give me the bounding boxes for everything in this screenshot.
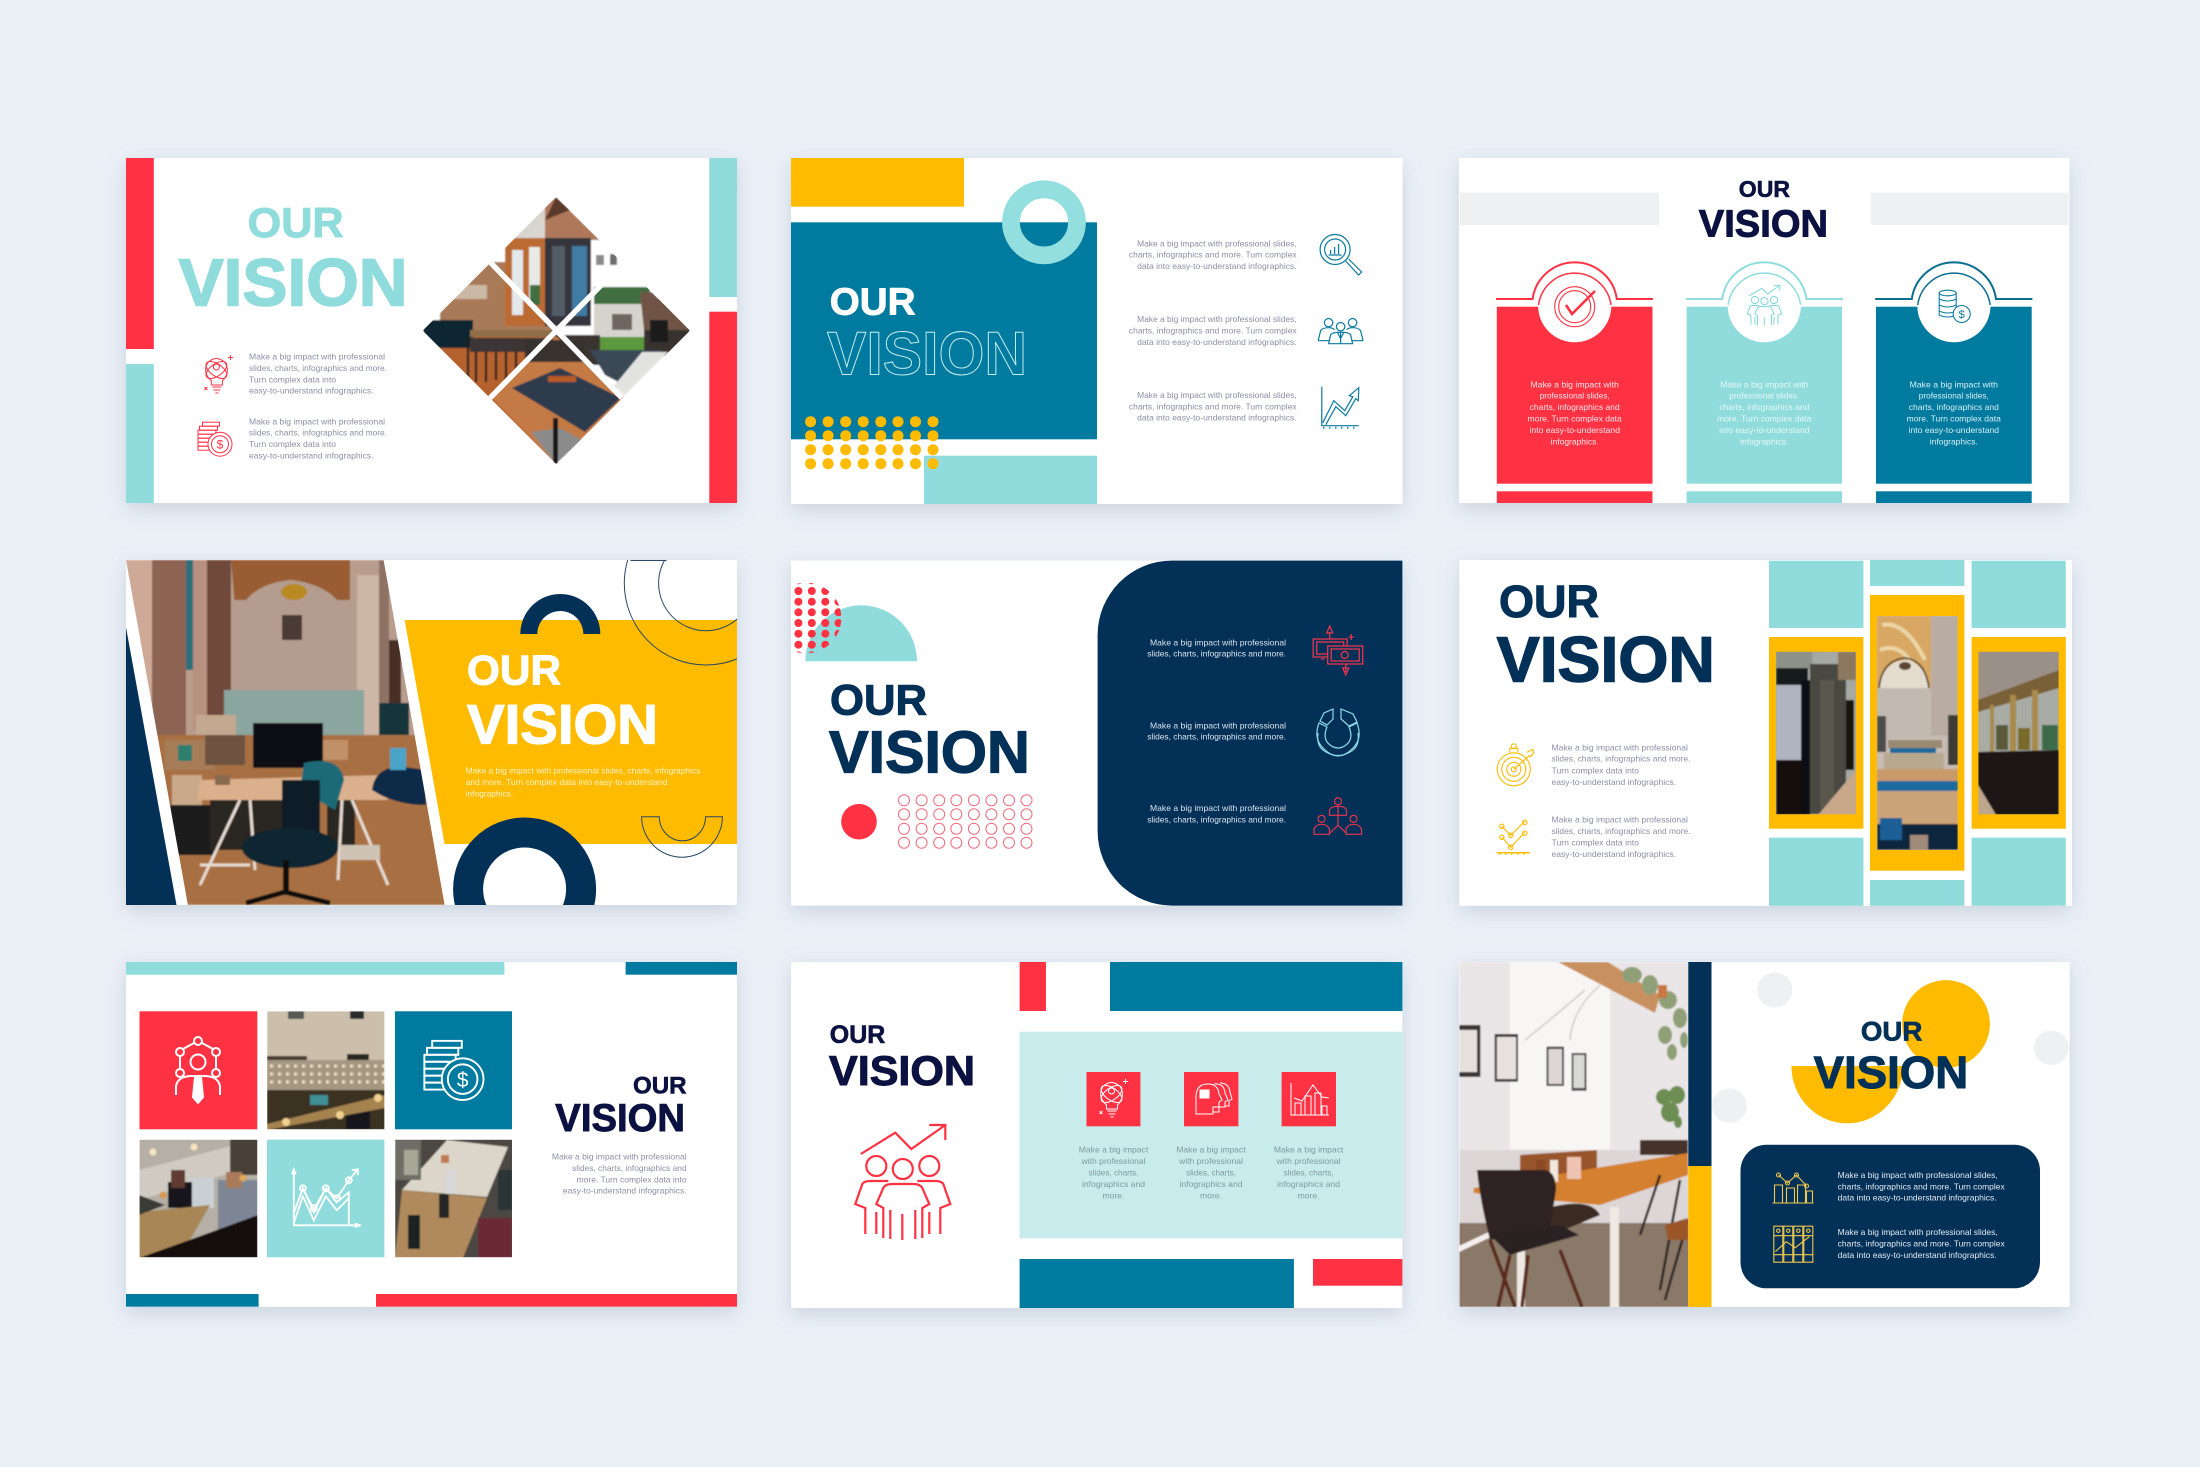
text block 2 bbox=[1552, 815, 1690, 859]
text block 1: Make a big impact with professional bbox=[1552, 742, 1688, 752]
text block 2: Make a big impact with professional slides, bbox=[1137, 314, 1297, 324]
card text: charts, infographics and bbox=[1719, 402, 1810, 412]
top blue strip bbox=[626, 962, 737, 975]
title: vision outline: VISION bbox=[827, 320, 1027, 388]
bottom red strip bbox=[376, 1294, 737, 1307]
text block: easy-to-understand infographics. bbox=[563, 1186, 687, 1196]
yellow block bbox=[405, 620, 737, 844]
blue block bbox=[791, 222, 1097, 439]
yellow photo frames bbox=[1769, 595, 2066, 871]
title: our: OUR bbox=[1861, 1017, 1922, 1047]
text block 1: data into easy-to-understand infographics. bbox=[1838, 1193, 1997, 1203]
card text: Make a big impact with bbox=[1530, 379, 1619, 389]
icon: coin stack: $ bbox=[1959, 309, 1965, 321]
red right bar bbox=[709, 312, 737, 503]
panel: slide 5 navy right panel bbox=[791, 561, 1402, 906]
navy info card bbox=[1740, 1145, 2040, 1288]
gray circles bbox=[1712, 972, 2069, 1123]
gray band left bbox=[1460, 193, 1659, 225]
title: vision: VISION bbox=[1699, 204, 1828, 246]
yellow dot grid bbox=[805, 416, 938, 469]
text column 3 bbox=[1274, 1145, 1344, 1201]
bottom blue strip bbox=[126, 1294, 259, 1307]
photo: string lights bbox=[267, 1011, 385, 1130]
icon: area chart bbox=[292, 1169, 360, 1227]
icon: team growth large bbox=[855, 1125, 950, 1240]
text block 1: Make a big impact with professional bbox=[1150, 637, 1286, 647]
icon: line chart bbox=[1497, 820, 1530, 855]
panel: slide 9 cafe photo bbox=[1459, 962, 2070, 1307]
card: blue bbox=[1875, 262, 2032, 503]
panel: slide 8 light teal panel bbox=[791, 962, 1402, 1308]
card text: charts, infographics and bbox=[1909, 402, 1999, 412]
icon: org people bbox=[1314, 798, 1362, 834]
card: bulb bbox=[1086, 1072, 1140, 1126]
card text: into easy-to-understand bbox=[1719, 425, 1810, 435]
thin half ring: bottom right bbox=[642, 817, 722, 857]
yellow block bbox=[791, 158, 964, 207]
text column 1: Make a big impact bbox=[1079, 1145, 1149, 1155]
text block: infographics. bbox=[466, 788, 513, 798]
title: our: OUR bbox=[467, 647, 561, 694]
text block 1 bbox=[1129, 238, 1298, 271]
icon: stopwatch target bbox=[1497, 744, 1534, 786]
light teal block bbox=[1020, 1032, 1402, 1238]
text block 1 bbox=[1838, 1170, 2006, 1203]
infographic canvas bbox=[120, 158, 2078, 1320]
text block 1 bbox=[249, 352, 387, 396]
text column 1: slides, charts, bbox=[1088, 1168, 1138, 1178]
title: our: OUR bbox=[830, 282, 916, 324]
text block 3: charts, infographics and more. Turn complex bbox=[1129, 401, 1298, 411]
text column 1 bbox=[1079, 1145, 1149, 1201]
text column 3: infographics and bbox=[1277, 1179, 1340, 1189]
icon: binders bbox=[1774, 1226, 1813, 1262]
yellow bar bbox=[1688, 1166, 1712, 1307]
text column 2 bbox=[1176, 1145, 1246, 1201]
text column 3: more. bbox=[1298, 1191, 1320, 1201]
tile: teal chart icon bbox=[267, 1140, 384, 1257]
text column 2: infographics and bbox=[1180, 1179, 1243, 1189]
title: vision: VISION bbox=[829, 1047, 975, 1094]
text block 3: Make a big impact with professional bbox=[1150, 803, 1286, 813]
icon: check badge bbox=[1555, 287, 1595, 327]
text block 1: slides, charts, infographics and more. bbox=[1552, 754, 1690, 764]
card text bbox=[1528, 379, 1622, 447]
teal ring bbox=[1011, 189, 1077, 255]
card text bbox=[1907, 379, 2001, 447]
panel: slide 6 photo columns bbox=[1459, 560, 2072, 906]
teal right bar bbox=[709, 158, 737, 297]
text block 2: slides, charts, infographics and more. bbox=[249, 428, 387, 438]
card text: infographics. bbox=[1740, 437, 1788, 447]
text column 1: infographics and bbox=[1082, 1179, 1145, 1189]
text block 3: slides, charts, infographics and more. bbox=[1147, 814, 1286, 824]
panel: slide 3 three cards bbox=[1459, 158, 2070, 503]
text block 2: Turn complex data into bbox=[1552, 838, 1639, 848]
icon: coins: $ bbox=[457, 1069, 469, 1092]
text block 3: data into easy-to-understand infographics. bbox=[1137, 413, 1297, 423]
panel: slide 4 yellow with hall photo bbox=[120, 560, 744, 918]
card text: infographics. bbox=[1930, 437, 1978, 447]
title: vision: VISION bbox=[555, 1097, 685, 1140]
navy wedge bbox=[126, 627, 176, 905]
card text: more. Turn complex data bbox=[1528, 414, 1622, 424]
title: our: OUR bbox=[1499, 576, 1599, 627]
card text: professional slides, bbox=[1729, 391, 1799, 401]
photo: workspace desk bbox=[139, 1139, 258, 1258]
card text: Make a big impact with bbox=[1910, 379, 1998, 389]
title: our: OUR bbox=[830, 1021, 885, 1049]
text block: Make a big impact with professional slides, charts, infographics bbox=[466, 766, 700, 776]
text block 2 bbox=[1129, 314, 1298, 347]
text block: Make a big impact with professional bbox=[552, 1151, 687, 1161]
navy rounded panel bbox=[1098, 561, 1402, 906]
text column 3: Make a big impact bbox=[1274, 1145, 1344, 1155]
card text: into easy-to-understand bbox=[1909, 425, 1999, 435]
red left bar bbox=[126, 158, 154, 349]
card text: more. Turn complex data bbox=[1907, 414, 2001, 424]
text block 2: slides, charts, infographics and more. bbox=[1552, 826, 1690, 836]
icon: money arrows bbox=[1313, 626, 1363, 675]
text column 3: with professional bbox=[1276, 1156, 1341, 1166]
text block bbox=[552, 1151, 687, 1196]
teal top tiles bbox=[1769, 560, 2066, 628]
red circle bbox=[841, 804, 877, 840]
text block 2 bbox=[1147, 720, 1286, 742]
icon: atom bulb bbox=[1098, 1079, 1128, 1117]
card text bbox=[1717, 379, 1812, 447]
icon: team bbox=[1318, 318, 1363, 344]
arch: navy half ring bbox=[520, 594, 600, 634]
blue bottom block bbox=[1020, 1259, 1294, 1308]
icon: coins bbox=[198, 422, 232, 456]
icon: atom bulb bbox=[203, 355, 233, 393]
title: our: OUR bbox=[830, 676, 927, 724]
title: vision: VISION bbox=[1497, 624, 1715, 696]
gray band right bbox=[1871, 193, 2069, 225]
text block 1: slides, charts, infographics and more. bbox=[1147, 649, 1286, 659]
text block 1 bbox=[1147, 637, 1286, 659]
card: teal bbox=[1686, 262, 1843, 503]
text block 2: Make a big impact with professional slides, bbox=[1838, 1227, 1998, 1237]
text column 3: slides, charts, bbox=[1284, 1168, 1334, 1178]
title: our: OUR bbox=[633, 1073, 687, 1100]
teal half circle bbox=[805, 605, 917, 661]
text column 2: more. bbox=[1200, 1191, 1222, 1201]
blue top block bbox=[1110, 962, 1402, 1011]
text block 2: data into easy-to-understand infographics. bbox=[1838, 1250, 1997, 1260]
text block: and more. Turn complex data into easy-to-understand bbox=[466, 777, 668, 787]
red top block bbox=[1020, 962, 1046, 1011]
card text: professional slides, bbox=[1919, 391, 1989, 401]
text block 1: Make a big impact with professional slides, bbox=[1838, 1170, 1998, 1180]
title: our: OUR bbox=[1739, 176, 1790, 202]
text block 1: Make a big impact with professional bbox=[249, 352, 385, 362]
text block: more. Turn complex data into bbox=[577, 1174, 687, 1184]
red dots clipped circle bbox=[794, 582, 842, 654]
photo: vaulted hall bbox=[1876, 615, 1958, 851]
card: bar chart bbox=[1282, 1072, 1336, 1126]
icon: donut chart bbox=[1317, 709, 1359, 756]
panel: slide 2 blue block bbox=[791, 158, 1402, 504]
top teal strip bbox=[126, 962, 504, 975]
text block 3: Make a big impact with professional slides, bbox=[1137, 390, 1297, 400]
card text: Make a big impact with bbox=[1720, 379, 1809, 389]
text block 2: charts, infographics and more. Turn complex bbox=[1838, 1238, 2006, 1248]
thin ring: top right bbox=[624, 560, 737, 666]
text block 1: easy-to-understand infographics. bbox=[249, 386, 374, 396]
text block 2: easy-to-understand infographics. bbox=[1552, 849, 1676, 859]
text block 1: data into easy-to-understand infographics. bbox=[1137, 261, 1297, 271]
text block 1: easy-to-understand infographics. bbox=[1552, 777, 1676, 787]
text block 3 bbox=[1147, 803, 1286, 824]
text column 2: Make a big impact bbox=[1176, 1145, 1246, 1155]
text block 1: Turn complex data into bbox=[1552, 765, 1639, 775]
text block 2: Make a big impact with professional bbox=[1552, 815, 1688, 825]
photo: diamond interior bbox=[420, 195, 692, 467]
card: red bbox=[1496, 262, 1653, 503]
yellow circle bbox=[1902, 980, 1990, 1068]
text column 1: with professional bbox=[1080, 1156, 1146, 1166]
card text: more. Turn complex data bbox=[1717, 414, 1812, 424]
text block 2: charts, infographics and more. Turn complex bbox=[1129, 325, 1298, 335]
outlined circle grid bbox=[898, 795, 1032, 848]
icon: bars with trend bbox=[1772, 1173, 1814, 1203]
icon: growth chart bbox=[1322, 387, 1359, 429]
text block 1: slides, charts, infographics and more. bbox=[249, 363, 387, 373]
icon: bars and line bbox=[1291, 1083, 1329, 1115]
navy bar bbox=[1688, 962, 1712, 1166]
tile: blue coins icon bbox=[395, 1011, 512, 1129]
icon: magnifier bbox=[1320, 234, 1362, 275]
text block 2: slides, charts, infographics and more. bbox=[1147, 732, 1286, 742]
title: vision: VISION bbox=[829, 720, 1030, 786]
teal bottom tiles bbox=[1769, 838, 2066, 906]
teal block bbox=[924, 456, 1097, 504]
text block 1: Turn complex data into bbox=[249, 374, 336, 384]
text block 2 bbox=[249, 416, 387, 461]
panel: slide 1 diamond photo bbox=[126, 158, 737, 503]
text block 2 bbox=[1838, 1227, 2006, 1260]
text block 2: Make a big impact with professional bbox=[1150, 720, 1286, 730]
text block 1: Make a big impact with professional slides, bbox=[1137, 238, 1297, 248]
text block 3 bbox=[1129, 390, 1298, 423]
icon: coin stack bbox=[1939, 290, 1970, 322]
text block 2: Make a big impact with professional bbox=[249, 416, 385, 426]
card text: charts, infographics and bbox=[1530, 402, 1620, 412]
photo: office hall bbox=[120, 560, 456, 905]
title: vision: VISION bbox=[1814, 1047, 1968, 1098]
text block 1 bbox=[1552, 742, 1690, 787]
text block 1: charts, infographics and more. Turn complex bbox=[1838, 1181, 2006, 1191]
yellow half circle bbox=[1791, 1066, 1903, 1123]
photo: long table bbox=[395, 1139, 513, 1258]
photo: marble wall bbox=[1978, 651, 2060, 816]
text column 1: more. bbox=[1102, 1191, 1124, 1201]
white cross dividers bbox=[490, 262, 622, 398]
icon: manager network bbox=[176, 1037, 220, 1103]
card text: infographics. bbox=[1551, 437, 1599, 447]
card text: professional slides, bbox=[1540, 391, 1610, 401]
photo: corridor door bbox=[1775, 651, 1857, 816]
teal left bar bbox=[126, 364, 154, 503]
title: our: OUR bbox=[248, 199, 344, 246]
tile: red manager icon bbox=[140, 1011, 257, 1129]
title: vision: VISION bbox=[179, 246, 408, 320]
text column 2: slides, charts, bbox=[1186, 1168, 1236, 1178]
text block 1: charts, infographics and more. Turn complex bbox=[1129, 250, 1298, 260]
icon: coins: $ bbox=[217, 438, 224, 452]
icon: puzzle heads bbox=[1196, 1083, 1232, 1114]
title: vision: VISION bbox=[467, 692, 658, 756]
text block bbox=[466, 766, 700, 798]
text block 2: easy-to-understand infographics. bbox=[249, 451, 374, 461]
text block: slides, charts, infographics and bbox=[572, 1163, 687, 1173]
text block 2: Turn complex data into bbox=[249, 439, 336, 449]
text block 2: data into easy-to-understand infographics. bbox=[1137, 337, 1297, 347]
icon: team growth bbox=[1747, 285, 1782, 325]
text column 2: with professional bbox=[1178, 1156, 1243, 1166]
card: heads bbox=[1184, 1072, 1238, 1126]
red bottom block bbox=[1313, 1259, 1402, 1286]
card text: into easy-to-understand bbox=[1530, 425, 1620, 435]
ring: navy big bbox=[468, 832, 581, 946]
panel: slide 7 photo grid bbox=[126, 962, 737, 1307]
photo: cafe dining room bbox=[1459, 962, 1689, 1307]
